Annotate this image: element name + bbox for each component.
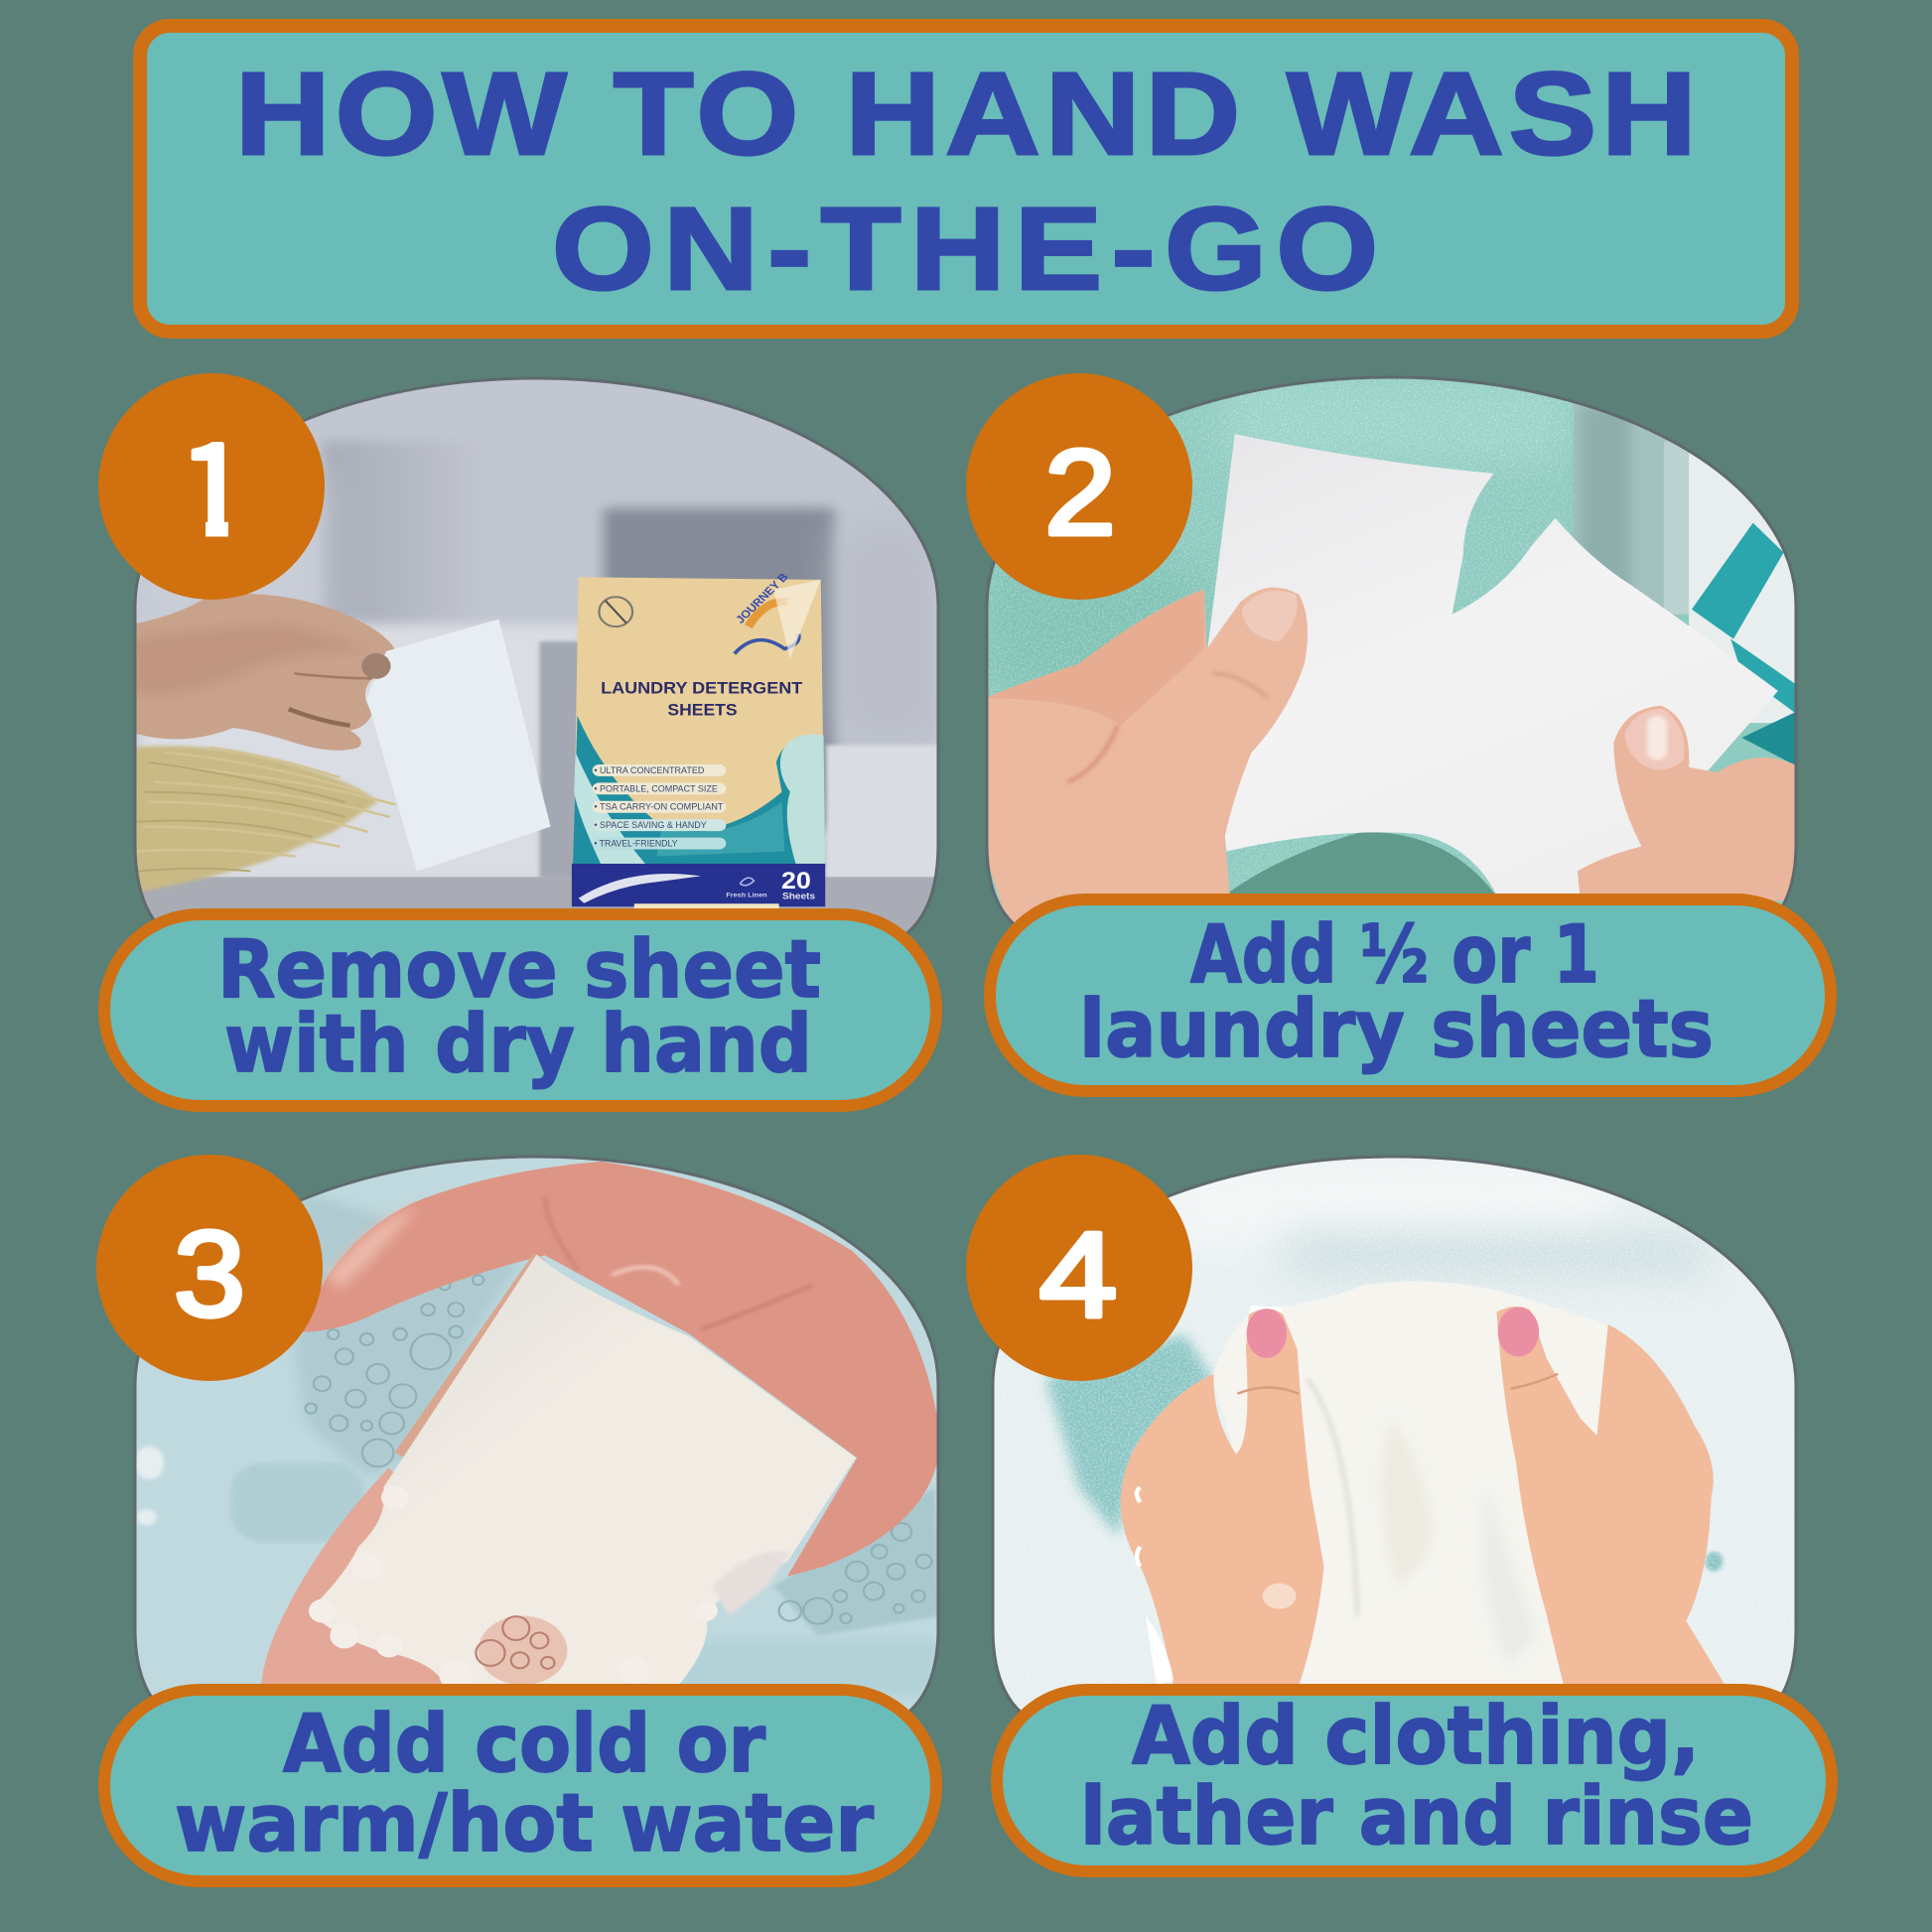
step 1 number badge: 1 <box>179 388 248 571</box>
step 4 caption pill <box>997 1690 1832 1871</box>
held sheet <box>366 620 551 871</box>
panel: step 4 outline <box>993 1157 1796 1732</box>
fur <box>133 746 394 894</box>
panel: step 4 photo <box>973 1142 1847 1734</box>
hand lower <box>261 1467 443 1684</box>
towel texture <box>989 379 1574 905</box>
product box: • TSA CARRY-ON COMPLIANT <box>594 802 724 813</box>
hand <box>133 594 394 751</box>
foam right <box>773 1487 940 1636</box>
panel: step 2 outline <box>987 377 1796 943</box>
step 2 number badge <box>966 373 1192 600</box>
product box: • PORTABLE, COMPACT SIZE <box>594 784 718 794</box>
title line 1: HOW TO HAND WASH <box>235 49 1697 179</box>
step 4 caption pill: Add clothing, <box>1132 1690 1700 1782</box>
translucent film <box>712 1551 790 1616</box>
left hand <box>984 588 1308 935</box>
step 3 caption pill: warm/hot water <box>175 1777 875 1869</box>
product box: JOURNEY B <box>734 571 791 626</box>
right hand <box>1578 706 1809 900</box>
cloth <box>1212 1281 1608 1685</box>
product box: • SPACE SAVING & HANDY <box>594 821 707 831</box>
soap suds <box>1137 1487 1296 1685</box>
title line 2: ON-THE-GO <box>552 184 1378 314</box>
step 3 number badge: 3 <box>174 1205 245 1341</box>
step 4 number badge <box>966 1155 1192 1381</box>
panel: step 1 outline <box>135 378 938 953</box>
hand upper <box>303 1162 940 1577</box>
dissolving sheet <box>308 1254 856 1685</box>
step 3 caption pill <box>104 1690 936 1881</box>
step 2 caption pill: Add ½ or 1 <box>1190 908 1599 1001</box>
pink bubbles <box>476 1616 567 1685</box>
step 1 caption pill: with dry hand <box>224 998 812 1090</box>
right hand <box>1497 1307 1725 1685</box>
teal rack <box>1692 522 1795 764</box>
step 4 caption pill: lather and rinse <box>1080 1770 1753 1863</box>
step 1 caption pill: Remove sheet <box>217 923 821 1016</box>
product box <box>572 571 825 908</box>
step 1 caption pill <box>104 914 936 1106</box>
foam speckle <box>973 1142 1847 1734</box>
lower towel <box>1229 832 1494 894</box>
step 1 number badge <box>98 373 325 600</box>
panel: step 1 photo <box>137 379 937 932</box>
panel: step 3 photo <box>137 1158 937 1710</box>
fingertip <box>361 653 391 679</box>
step 3 number badge <box>96 1155 323 1381</box>
foam edge <box>309 1485 718 1690</box>
step 2 caption pill <box>990 899 1831 1091</box>
product box: • ULTRA CONCENTRATED <box>594 765 705 776</box>
left thumbnail <box>1241 591 1298 641</box>
foam left <box>294 1191 523 1477</box>
product box: Sheets <box>782 892 815 902</box>
panel: step 2 photo <box>989 379 1795 922</box>
step 4 number badge: 4 <box>1039 1206 1117 1342</box>
bubbles <box>306 1275 931 1624</box>
product box: 20 <box>781 868 811 894</box>
product box: • TRAVEL-FRIENDLY <box>594 839 678 849</box>
step 2 number badge: 2 <box>1044 424 1116 560</box>
step 3 caption pill: Add cold or <box>283 1698 766 1790</box>
sheet edge <box>394 1253 545 1457</box>
product box: LAUNDRY DETERGENT <box>601 678 802 697</box>
product box: Fresh Linen <box>726 893 767 898</box>
step 2 caption pill: laundry sheets <box>1079 983 1714 1075</box>
product box: SHEETS <box>667 701 738 719</box>
left nail <box>1247 1309 1287 1358</box>
panel: step 3 outline <box>135 1157 938 1732</box>
title banner <box>140 26 1792 332</box>
right nail <box>1498 1308 1539 1356</box>
torn sheet <box>1207 434 1778 900</box>
left hand <box>1121 1306 1324 1685</box>
